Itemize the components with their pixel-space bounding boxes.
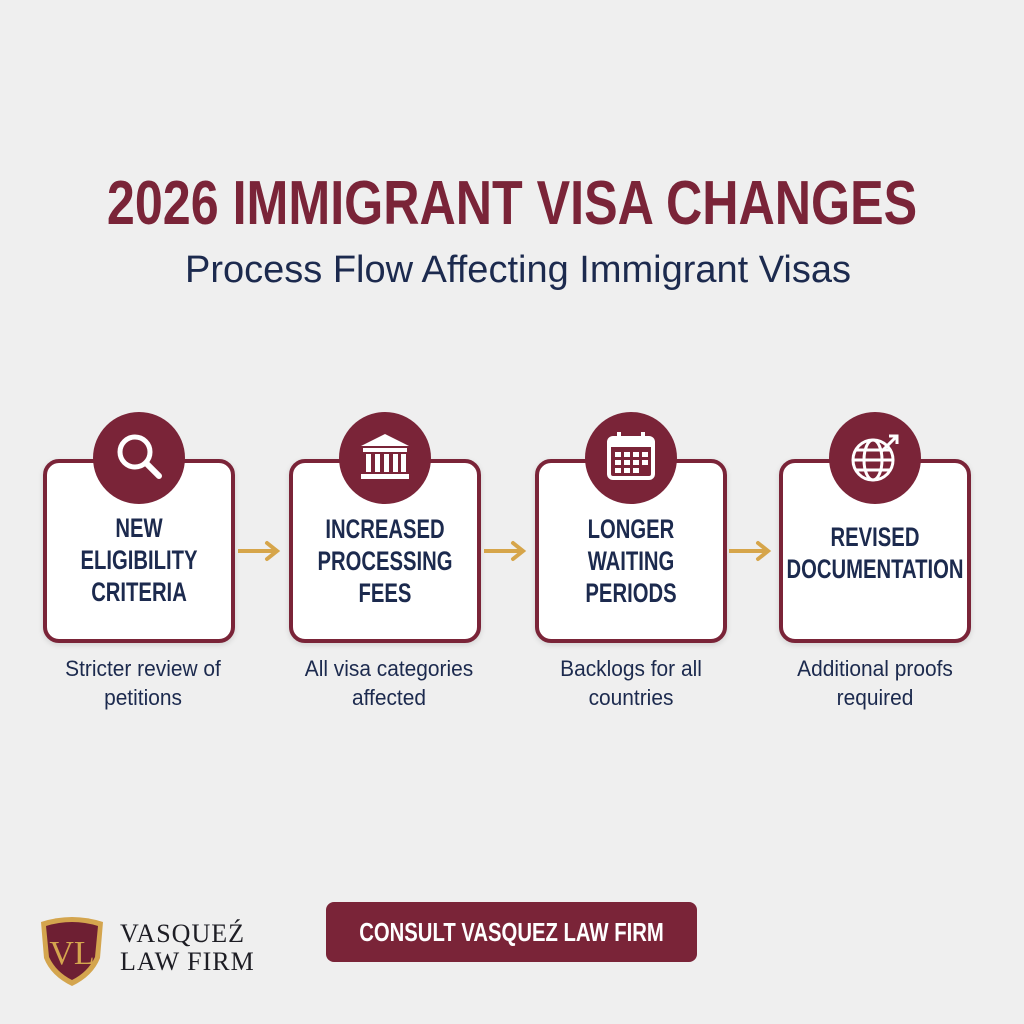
button: consult: CONSULT VASQUEZ LAW FIRM xyxy=(359,917,664,947)
caption 1 xyxy=(65,656,221,710)
caption 2: affected xyxy=(352,685,426,710)
caption 2 xyxy=(304,656,473,710)
logo xyxy=(41,917,255,986)
icon: magnifier xyxy=(93,412,185,504)
card 1: NEW xyxy=(115,513,163,543)
card 3: PERIODS xyxy=(585,578,677,608)
icon: shield: VL xyxy=(49,935,95,972)
card 3: WAITING xyxy=(588,546,674,576)
caption 4: Additional proofs xyxy=(797,656,953,681)
card 1 xyxy=(43,459,235,643)
caption 1: petitions xyxy=(104,685,182,710)
caption 4: required xyxy=(837,685,913,710)
icon: bank xyxy=(339,412,431,504)
card 2: PROCESSING xyxy=(317,546,453,576)
button: consult xyxy=(326,902,697,962)
arrow 3 xyxy=(729,540,772,562)
card 3 xyxy=(535,459,727,643)
card 1: CRITERIA xyxy=(91,577,187,607)
caption 3: countries xyxy=(589,685,673,710)
icon: calendar xyxy=(585,412,677,504)
caption 1: Stricter review of xyxy=(65,656,221,681)
firm name xyxy=(120,919,255,976)
card 3: LONGER xyxy=(588,514,674,544)
firm name: LAW FIRM xyxy=(120,947,255,976)
arrow 1 xyxy=(238,540,280,562)
card 4: REVISED xyxy=(831,522,919,552)
arrow 2 xyxy=(484,540,526,562)
card 4: DOCUMENTATION xyxy=(786,554,963,584)
subtitle: Process Flow Affecting Immigrant Visas xyxy=(185,249,851,291)
firm name: VASQUEŹ xyxy=(120,919,245,948)
icon: shield xyxy=(41,917,103,986)
card 1: ELIGIBILITY xyxy=(80,545,198,575)
card 4 xyxy=(779,459,971,643)
card 2: FEES xyxy=(359,578,411,608)
caption 3: Backlogs for all xyxy=(560,656,702,681)
icon: globe xyxy=(829,412,921,504)
caption 4 xyxy=(797,656,953,710)
card 2 xyxy=(289,459,481,643)
caption 3 xyxy=(560,656,702,710)
title: 2026 IMMIGRANT VISA CHANGES xyxy=(107,169,917,238)
card 2: INCREASED xyxy=(325,514,445,544)
caption 2: All visa categories xyxy=(305,656,473,681)
